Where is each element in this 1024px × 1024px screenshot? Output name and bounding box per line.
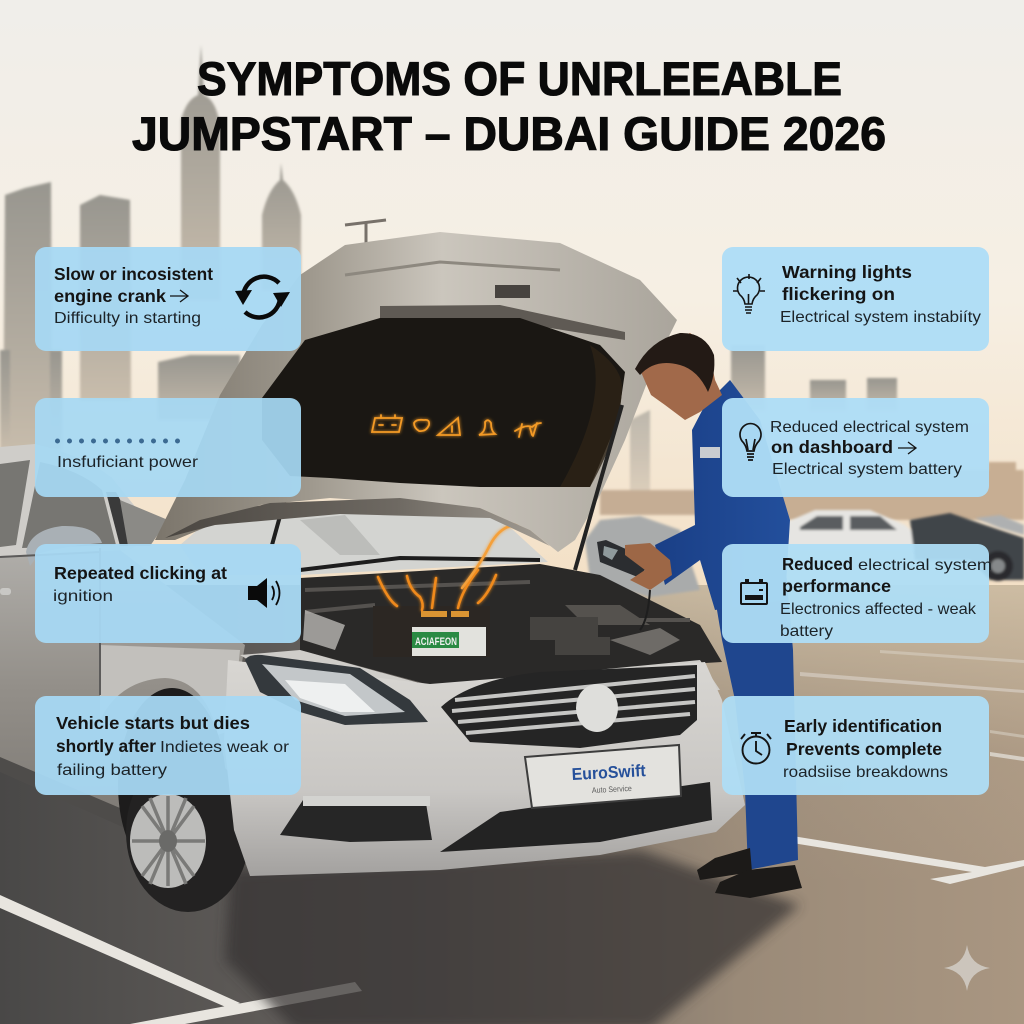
battery: ACIAFEON bbox=[415, 636, 457, 648]
side windows bbox=[0, 460, 116, 548]
battery flames bbox=[378, 508, 528, 610]
card: slow engine crank: Slow or incosistent bbox=[54, 264, 213, 284]
glowing warning icons bbox=[372, 415, 541, 437]
asphalt ground bbox=[0, 585, 1024, 1024]
title: SYMPTOMS OF UNRLEEABLE bbox=[197, 52, 842, 105]
hood inner dark liner bbox=[262, 318, 625, 487]
card: reduced performance: performance bbox=[782, 576, 891, 596]
card: warning lights: flickering on bbox=[782, 284, 895, 304]
car illustration bbox=[0, 232, 745, 912]
card: slow engine crank bbox=[35, 247, 301, 351]
hood strut left bbox=[272, 498, 285, 545]
wheel bbox=[118, 688, 250, 912]
card: reduced performance: battery bbox=[780, 623, 833, 640]
street lamp bbox=[345, 220, 386, 248]
car shadow bbox=[225, 850, 800, 1024]
card: reduced electrical system dashboard: Reduced electrical system bbox=[770, 419, 969, 436]
upper grille bbox=[441, 665, 697, 748]
hood bbox=[155, 232, 677, 552]
title bbox=[132, 52, 886, 160]
parking lines bbox=[0, 650, 1024, 1024]
hands bbox=[625, 543, 672, 590]
license plate bbox=[525, 745, 681, 808]
arrow bbox=[170, 290, 188, 302]
card: slow engine crank: engine crank bbox=[54, 286, 166, 306]
card: repeated clicking: Repeated clicking at bbox=[54, 563, 227, 583]
card: early identification: Early identification bbox=[784, 716, 942, 736]
card: vehicle dies: Vehicle starts but dies bbox=[56, 713, 250, 733]
car roof bbox=[0, 444, 158, 556]
left fog vent bbox=[280, 796, 432, 842]
car side body bbox=[0, 535, 245, 872]
hood strut right bbox=[575, 405, 622, 570]
door sill shadow bbox=[0, 757, 125, 828]
engine bay bbox=[300, 564, 722, 685]
card: warning lights: Warning lights bbox=[782, 262, 912, 282]
torso bbox=[655, 380, 790, 610]
license plate: EuroSwift bbox=[571, 761, 646, 784]
icon: refresh arrows bbox=[235, 277, 290, 317]
card: vehicle dies: Indietes weak or bbox=[160, 739, 290, 756]
card: early identification: Prevents complete bbox=[786, 739, 942, 759]
card: vehicle dies: failing battery bbox=[57, 762, 167, 779]
card: early identification bbox=[722, 696, 989, 795]
icon: light bulb bbox=[740, 424, 761, 460]
trousers bbox=[712, 560, 798, 870]
shoes bbox=[697, 848, 752, 880]
icon: speaker bbox=[248, 578, 280, 608]
card: reduced electrical system dashboard bbox=[722, 398, 989, 497]
card: insufficient power: Insfuficiant power bbox=[57, 454, 199, 471]
card: repeated clicking: ignition bbox=[53, 588, 113, 605]
card: slow engine crank: Difficulty in starting bbox=[54, 310, 201, 327]
card: warning lights: Electrical system instabiíty bbox=[780, 309, 981, 326]
battery bbox=[373, 606, 490, 657]
card: reduced electrical system dashboard: Electrical system battery bbox=[772, 461, 962, 478]
card: reduced electrical system dashboard: on dashboard bbox=[771, 437, 893, 457]
head bbox=[641, 333, 722, 420]
diagnostic scanner bbox=[597, 540, 650, 630]
hood underside strip bbox=[165, 498, 550, 546]
card: insufficient power bbox=[35, 398, 301, 497]
windshield bbox=[180, 510, 548, 575]
icon: stopwatch bbox=[741, 733, 771, 764]
card: reduced performance: Electronics affected - weak bbox=[780, 601, 977, 618]
card: warning lights bbox=[722, 247, 989, 351]
card: vehicle dies: shortly after bbox=[56, 736, 156, 756]
card: reduced performance bbox=[722, 544, 992, 643]
title: JUMPSTART – DUBAI GUIDE 2026 bbox=[132, 107, 886, 160]
side mirror bbox=[26, 526, 102, 566]
lower grille bbox=[440, 782, 712, 852]
front bumper bbox=[224, 660, 745, 876]
skyline buildings bbox=[0, 45, 1024, 520]
sky background bbox=[0, 0, 1024, 600]
door details bbox=[0, 548, 100, 695]
watermark sparkle bbox=[944, 945, 990, 991]
card: reduced performance: Reduced bbox=[782, 554, 853, 574]
card: repeated clicking bbox=[35, 544, 301, 643]
background parked cars bbox=[585, 510, 1024, 597]
front hood surface bbox=[240, 650, 720, 700]
icon: light bulb with rays bbox=[733, 274, 765, 313]
front fender highlight bbox=[100, 645, 240, 735]
arrow bbox=[898, 442, 916, 454]
mechanic bbox=[625, 333, 802, 898]
dotted line bbox=[58, 438, 178, 444]
icon: battery bbox=[741, 579, 767, 604]
license plate: Auto Service bbox=[592, 784, 633, 795]
card: vehicle dies bbox=[35, 696, 301, 795]
headlight bbox=[245, 655, 428, 725]
card: reduced performance: electrical system bbox=[858, 557, 992, 574]
wiper bbox=[300, 558, 540, 570]
card: early identification: roadsiise breakdowns bbox=[783, 764, 948, 781]
